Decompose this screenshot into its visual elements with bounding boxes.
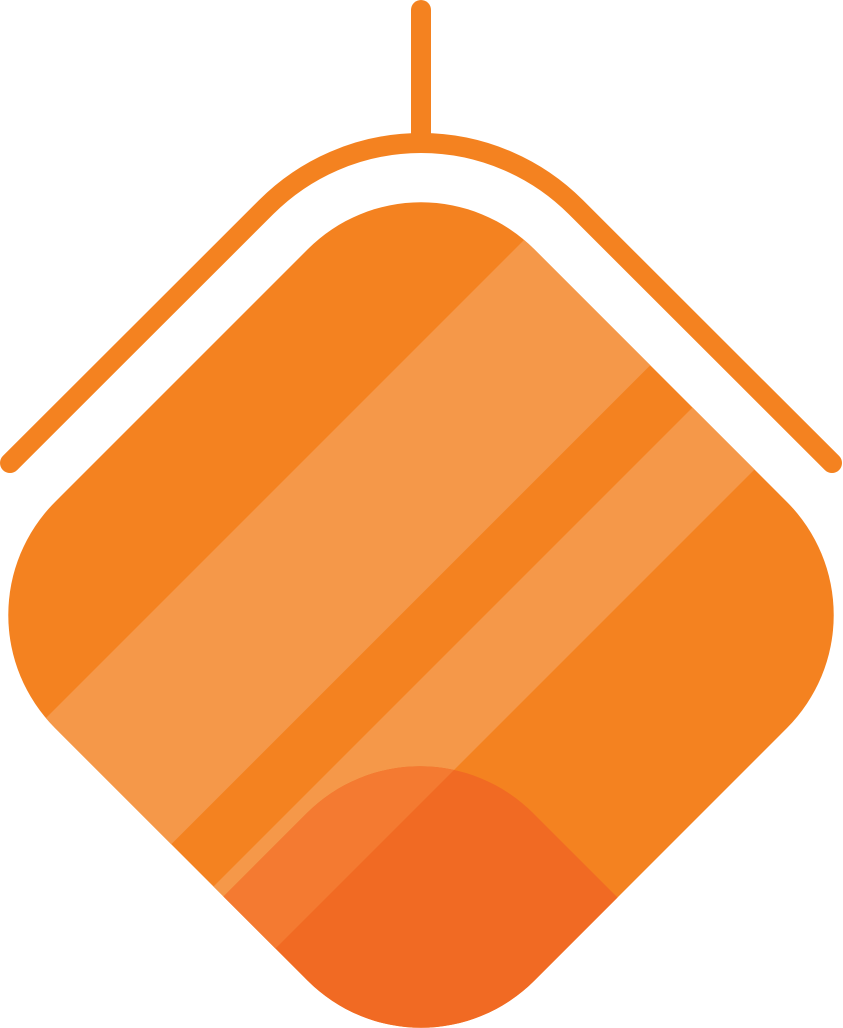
roof line xyxy=(10,10,832,463)
diamond icon xyxy=(8,202,834,1028)
